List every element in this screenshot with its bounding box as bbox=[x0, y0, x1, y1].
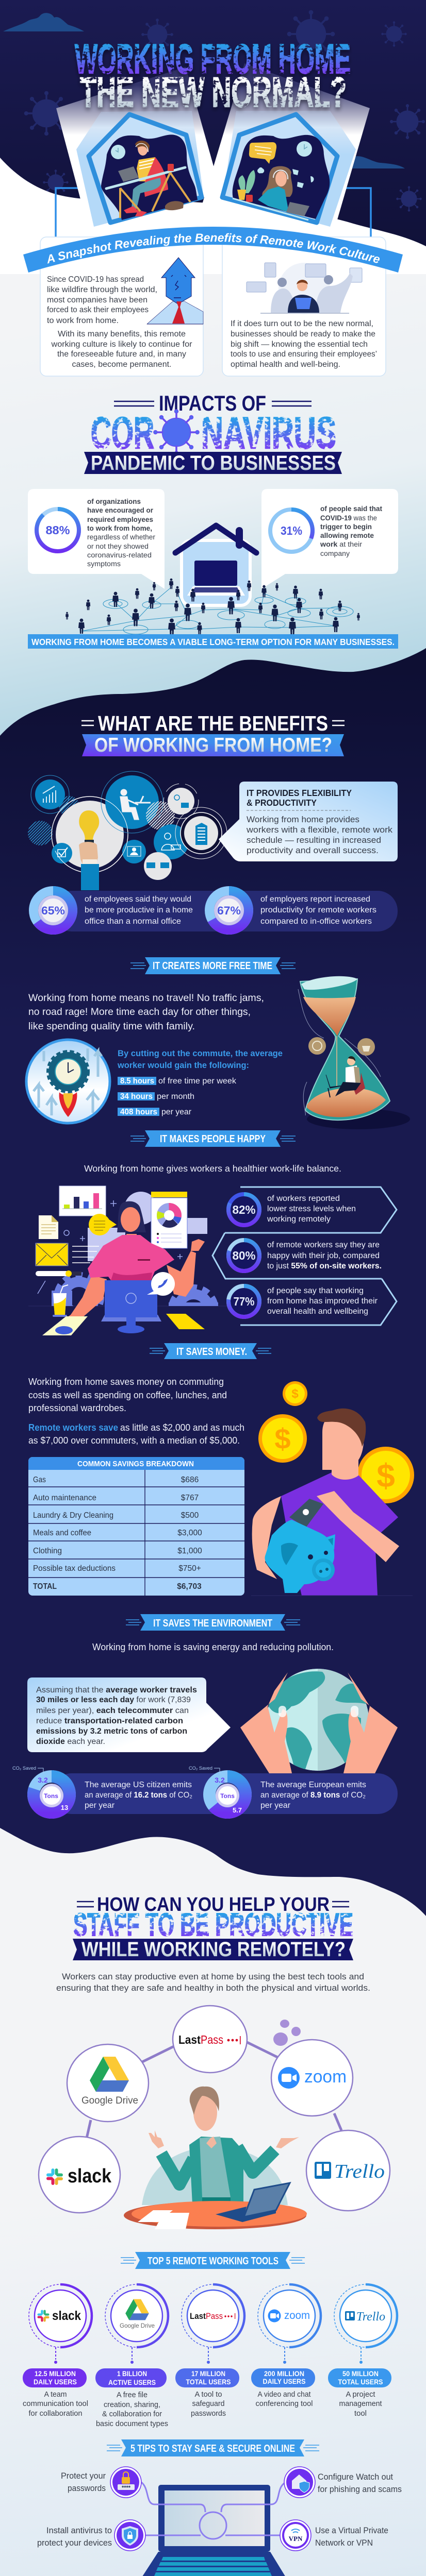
donut: 65% bbox=[34, 891, 73, 930]
illustration: man with piggy bank bbox=[251, 1381, 414, 1596]
heading: how can you help your staff bbox=[73, 1894, 353, 1961]
donut: European 8.9 tons: Tons bbox=[220, 1792, 235, 1800]
text: US citizen: an average of 16.2 tons of CO₂ bbox=[85, 1791, 192, 1800]
donut: US citizen 16.2 tons: 13 bbox=[61, 1804, 68, 1811]
text block intro right: tools to use and ensuring their employees’ bbox=[231, 350, 377, 359]
donut: European 8.9 tons bbox=[189, 1766, 245, 1814]
photo: woman working on headset bbox=[198, 63, 370, 230]
pie card bbox=[151, 1192, 187, 1248]
heading: how can you help your staff: WHILE WORKING REMOTELY? bbox=[81, 1938, 346, 1961]
stat: 82%: lower stress levels when bbox=[267, 1205, 356, 1213]
text: European: per year bbox=[260, 1801, 290, 1810]
heading: what are the benefits: OF WORKING FROM HOME? bbox=[94, 734, 332, 756]
donut: US citizen 16.2 tons: Tons bbox=[44, 1792, 58, 1800]
tool: Google Drive: Google Drive bbox=[120, 2322, 155, 2329]
text: 31 percent: work at their bbox=[320, 540, 363, 548]
text: saves money: as little as $2,000 and as much bbox=[120, 1422, 244, 1433]
tool: Trello bbox=[328, 2284, 397, 2418]
background: light middle section bbox=[0, 274, 426, 748]
table: common savings breakdown: Laundry & Dry Cleaning bbox=[33, 1511, 113, 1520]
tip: protect your passwords bbox=[61, 2467, 141, 2498]
tool: Slack bbox=[23, 2284, 92, 2418]
tip: protect your passwords: **** bbox=[122, 2485, 131, 2491]
text: gain the following with highlights: 408 hours bbox=[120, 1108, 157, 1116]
icon: light bulb in hand bbox=[79, 810, 99, 890]
ribbon: it saves the environment: IT SAVES THE ENVIRONMENT bbox=[153, 1618, 272, 1629]
tip: configure and watch phishing: for phishing and scams bbox=[318, 2485, 402, 2494]
text: gain the following with highlights: worker would gain the following: bbox=[117, 1060, 249, 1070]
text: no travel: no road rage! More time each day for other things, bbox=[28, 1007, 251, 1018]
stat: 77%: overall health and wellbeing bbox=[267, 1307, 368, 1316]
tool: Google Drive: & collaboration for bbox=[102, 2410, 162, 2418]
table: common savings breakdown: TOTAL bbox=[33, 1582, 57, 1591]
speech box: flexibility and productivity bbox=[219, 782, 398, 861]
monitor bbox=[101, 1280, 161, 1333]
tip: protect your passwords: Protect your bbox=[61, 2471, 106, 2481]
ribbon: top 5 remote working tools: TOP 5 REMOTE WORKING TOOLS bbox=[148, 2256, 278, 2267]
tool: Zoom: A video and chat bbox=[258, 2391, 310, 2399]
tool: LastPass: Pass bbox=[206, 2311, 223, 2321]
ribbon: top 5 remote working tools bbox=[121, 2252, 305, 2269]
tip: use a VPN bbox=[280, 2520, 388, 2551]
speech box: carbon emissions bbox=[27, 1677, 231, 1752]
photo: man working at desk bbox=[56, 67, 221, 236]
ribbon: it saves money: IT SAVES MONEY. bbox=[176, 1346, 247, 1358]
tool: Zoom: DAILY USERS bbox=[263, 2377, 305, 2385]
text: saves money: costs as well as spending on coffee, lunches, and bbox=[28, 1390, 227, 1400]
stat: 82%: of workers reported bbox=[267, 1194, 340, 1203]
tool: Google Drive: 1 BILLION bbox=[117, 2369, 147, 2378]
text: saves money: Remote workers save bbox=[28, 1422, 118, 1433]
tool: Trello: TOTAL USERS bbox=[338, 2378, 383, 2386]
speech box: flexibility and productivity: Working from home provides bbox=[247, 815, 359, 824]
stat: 80%: of remote workers say they are bbox=[267, 1241, 380, 1249]
donut: 67% bbox=[209, 891, 249, 930]
ribbon: it saves money bbox=[150, 1343, 271, 1359]
text block intro left: cases, become permanent. bbox=[72, 360, 171, 369]
icon: coronavirus bbox=[154, 410, 199, 455]
text: saves money: Working from home saves money on commuting bbox=[28, 1377, 224, 1387]
chart card bbox=[59, 1186, 106, 1216]
tool: Google Drive: creation, sharing, bbox=[104, 2401, 160, 2409]
tip: configure and watch phishing bbox=[284, 2467, 402, 2498]
text block intro left: Since COVID-19 has spread bbox=[47, 275, 144, 284]
speech box: flexibility and productivity: workers with a flexible, remote work bbox=[246, 825, 393, 835]
text: 88 percent: symptoms bbox=[87, 560, 121, 568]
text: 67 percent: productivity for remote workers bbox=[260, 906, 376, 914]
ribbon: it creates more free time bbox=[130, 957, 296, 974]
table: common savings breakdown: Clothing bbox=[33, 1547, 62, 1555]
tool: LastPass: Last bbox=[190, 2311, 206, 2321]
text block intro left: With its many benefits, this remote bbox=[58, 330, 186, 338]
banner: long-term option bbox=[28, 634, 398, 649]
text block intro right: If it does turn out to be the new normal, bbox=[231, 319, 373, 328]
heading: impacts of coronavirus: NAVIRUS bbox=[201, 409, 336, 458]
text: 67 percent bbox=[260, 895, 376, 926]
text: saves money: professional wardrobes. bbox=[28, 1403, 126, 1413]
text: 65 percent bbox=[85, 895, 193, 926]
text: gain the following with highlights: per month bbox=[157, 1092, 194, 1101]
text: 88 percent: to work from home, bbox=[87, 524, 152, 532]
callout: 88 percent organizations bbox=[28, 489, 165, 589]
logo bubble: LastPass bbox=[173, 2006, 247, 2073]
tool: LastPass: A tool to bbox=[195, 2391, 222, 2399]
text: 88 percent: required employees bbox=[87, 516, 153, 523]
heading: impacts of coronavirus bbox=[84, 391, 342, 474]
text: 88 percent: have encouraged or bbox=[87, 506, 154, 514]
text: no travel: like spending quality time with family. bbox=[28, 1021, 195, 1032]
ribbon: it makes people happy bbox=[130, 1130, 296, 1147]
logo bubble: LastPass: Pass bbox=[201, 2033, 223, 2046]
heading: impacts of coronavirus: IMPACTS OF bbox=[159, 391, 266, 415]
table: common savings breakdown: $6,703 bbox=[177, 1582, 202, 1591]
tool: Trello: 50 MILLION bbox=[342, 2369, 379, 2378]
dark wave section background bbox=[0, 648, 426, 1916]
text: workers can stay productive bbox=[56, 1972, 370, 1993]
speech box: carbon emissions: Assuming that the average worker travels bbox=[36, 1686, 197, 1694]
arched banner with subtitle: A Snapshot Revealing the Benefits of Remote Work Culture bbox=[47, 233, 380, 264]
text: 88 percent: or not they showed bbox=[87, 543, 149, 550]
tool: Slack: for collaboration bbox=[29, 2410, 83, 2418]
logo bubble: Zoom bbox=[271, 2040, 353, 2116]
table: common savings breakdown: $3,000 bbox=[177, 1529, 202, 1537]
speech box: carbon emissions: reduce transportation-related carbon bbox=[36, 1717, 183, 1725]
tool: LastPass: 17 MILLION bbox=[191, 2369, 225, 2378]
logo bubble: Google Drive: Google Drive bbox=[81, 2095, 138, 2106]
donut: 88% bbox=[37, 509, 79, 551]
banner: long-term option: WORKING FROM HOME BECOMES A VIABLE LONG-TERM OPTION FOR MANY BUSINESSES. bbox=[31, 637, 395, 647]
text block intro left: the foreseeable future and, in many bbox=[57, 350, 186, 359]
text: no travel: Working from home means no travel! No traffic jams, bbox=[28, 993, 264, 1004]
background: light lower sections bbox=[0, 1752, 426, 2576]
text block intro left: to work from home. bbox=[47, 316, 119, 325]
tool: Slack: communication tool bbox=[23, 2400, 88, 2408]
speech box: carbon emissions: dioxide each year. bbox=[36, 1737, 105, 1746]
icon: clock rocket bbox=[26, 1040, 110, 1123]
donut: 31% bbox=[270, 510, 313, 552]
text: no travel bbox=[28, 993, 264, 1032]
illustration: woman at desk with dashboards bbox=[28, 1186, 227, 1335]
stat pill: 65 and 67 percent productivity bbox=[34, 891, 398, 931]
tool: Google Drive: A free file bbox=[117, 2391, 148, 2399]
illustration: laptop with security connectors bbox=[140, 2482, 287, 2576]
tool: Zoom: zoom bbox=[284, 2310, 310, 2321]
tool: Zoom: conferencing tool bbox=[256, 2400, 313, 2408]
crowd of figures bbox=[65, 579, 360, 636]
donut: 65%: 65% bbox=[41, 904, 65, 917]
stat: 77% bbox=[228, 1279, 397, 1325]
arrow panels with stats bbox=[212, 1187, 397, 1325]
speech box: carbon emissions: emissions by 3.2 metric tons of carbon bbox=[36, 1727, 187, 1736]
heading: what are the benefits: WHAT ARE THE BENEFITS bbox=[98, 711, 328, 735]
tool: Trello: management bbox=[339, 2400, 382, 2408]
white wave under the sky bbox=[0, 158, 426, 274]
heading: impacts of coronavirus: PANDEMIC TO BUSINESSES bbox=[91, 452, 336, 474]
ribbon: it creates more free time: IT CREATES MORE FREE TIME bbox=[153, 960, 272, 972]
text block intro left: most companies have been bbox=[47, 296, 148, 304]
tool: LastPass: TOTAL USERS bbox=[186, 2378, 231, 2386]
ribbon: it makes people happy: IT MAKES PEOPLE HAPPY bbox=[160, 1133, 266, 1145]
intro card left bbox=[40, 237, 203, 376]
woman figure bbox=[59, 1201, 205, 1328]
donut: 31%: 31% bbox=[281, 524, 302, 537]
text: 31 percent: COVID-19 was the bbox=[320, 514, 377, 522]
text: gain the following with highlights: per year bbox=[161, 1108, 191, 1116]
icon: remote team illustration bbox=[247, 263, 362, 314]
text: 88 percent: regardless of whether bbox=[87, 533, 156, 541]
tool: Zoom bbox=[251, 2284, 321, 2408]
tool: Google Drive: basic document types bbox=[96, 2420, 168, 2428]
text block intro left: forced to ask their employees bbox=[47, 306, 149, 314]
tip: install antivirus bbox=[37, 2520, 145, 2551]
heading: what are the benefits bbox=[81, 711, 345, 756]
tip: use a VPN: Use a Virtual Private bbox=[315, 2526, 388, 2535]
table: common savings breakdown: Meals and coffee bbox=[33, 1529, 91, 1537]
text: saves money bbox=[28, 1377, 244, 1446]
heading: how can you help your staff: HOW CAN YOU HELP YOUR bbox=[97, 1894, 330, 1916]
icon: house with laptop bbox=[175, 526, 256, 605]
text: European bbox=[260, 1781, 366, 1810]
illustration: hands holding globe bbox=[240, 1669, 398, 1773]
background virus particles bbox=[24, 10, 424, 211]
text: gain the following with highlights: 34 hours bbox=[120, 1092, 153, 1101]
tip: protect your passwords: passwords bbox=[68, 2484, 106, 2493]
table: common savings breakdown: $767 bbox=[181, 1494, 199, 1502]
tool: Trello: Trello bbox=[356, 2310, 385, 2324]
text block intro left: like wildfire through the world, bbox=[47, 285, 157, 294]
icon: banknote bbox=[289, 1499, 323, 1528]
icon: coins: $ bbox=[376, 1457, 395, 1494]
heading: impacts of coronavirus: COR bbox=[91, 409, 154, 458]
stat: 82%: 82% bbox=[232, 1203, 256, 1216]
cloud right bbox=[307, 154, 405, 168]
decorative purple dots bbox=[273, 2020, 301, 2046]
cloud top left bbox=[3, 13, 84, 31]
text: gain the following with highlights bbox=[117, 1048, 283, 1116]
connector lines between tool logos bbox=[87, 2042, 341, 2138]
text: gain the following with highlights: By cutting out the commute, the average bbox=[118, 1048, 283, 1058]
ribbon: it saves the environment bbox=[126, 1614, 300, 1631]
table: common savings breakdown: $750+ bbox=[178, 1564, 201, 1573]
icon: piggy bank bbox=[265, 1520, 335, 1593]
stat: 77%: from home has improved their bbox=[267, 1297, 378, 1306]
text: 31 percent: company bbox=[320, 550, 350, 557]
speech box: carbon emissions: miles per year), each telecommuter can bbox=[36, 1706, 189, 1715]
text: saves money: as $7,000 over commuters, with a median of $5,000. bbox=[28, 1435, 240, 1446]
illustration: shrugging man at table bbox=[124, 2087, 307, 2229]
text: 65 percent: of employees said they would bbox=[85, 895, 191, 904]
text: 67 percent: of employers report increased bbox=[260, 895, 370, 904]
logo bubble: Trello bbox=[306, 2130, 390, 2211]
tool: Google Drive: ACTIVE USERS bbox=[108, 2378, 156, 2386]
icon: hourglass with worker bbox=[298, 976, 410, 1129]
text: 67 percent: compared to in-office workers bbox=[260, 917, 372, 926]
icon: coins bbox=[258, 1381, 414, 1503]
intro card right bbox=[222, 237, 386, 376]
tip: use a VPN: Network or VPN bbox=[315, 2538, 373, 2548]
speech box: flexibility and productivity: IT PROVIDES FLEXIBILITY bbox=[247, 788, 352, 798]
background: dark top sky bbox=[0, 0, 426, 274]
tip: use a VPN: VPN bbox=[289, 2535, 303, 2543]
stat: 80%: happy with their job, compared bbox=[267, 1251, 380, 1260]
speech box: carbon emissions: 30 miles or less each day for work (7,839 bbox=[36, 1696, 191, 1704]
arched banner with subtitle bbox=[23, 227, 403, 273]
stat: 80%: 80% bbox=[232, 1249, 256, 1262]
donut: European 8.9 tons: 5.7 bbox=[233, 1806, 242, 1814]
table: common savings breakdown bbox=[28, 1457, 244, 1596]
icon: coins: $ bbox=[291, 1387, 299, 1401]
table: common savings breakdown: Auto maintenance bbox=[33, 1494, 96, 1502]
donut: 88%: 88% bbox=[45, 523, 70, 537]
text: workers can stay productive: ensuring that they are safe and healthy in both the physical and virtual worlds. bbox=[56, 1984, 370, 1993]
table: common savings breakdown: Possible tax deductions bbox=[33, 1564, 116, 1573]
tool: LastPass bbox=[175, 2284, 244, 2418]
text block intro right bbox=[231, 319, 377, 369]
speech box: flexibility and productivity: productivity and overall success. bbox=[247, 845, 379, 855]
speech box: flexibility and productivity: schedule — resulting in increased bbox=[247, 835, 381, 845]
tool: Trello: A project bbox=[346, 2391, 375, 2399]
table: common savings breakdown: $686 bbox=[181, 1476, 199, 1484]
stat: 80%: to just 55% of on-site workers. bbox=[267, 1262, 382, 1270]
tip: install antivirus: protect your devices bbox=[37, 2538, 112, 2548]
title bbox=[75, 36, 351, 116]
tool: Trello: tool bbox=[354, 2410, 367, 2418]
tool: Zoom: 200 MILLION bbox=[264, 2369, 304, 2378]
text: 31 percent: of people said that bbox=[320, 505, 383, 513]
document bbox=[39, 1215, 58, 1239]
text: saving energy: Working from home is saving energy and reducing pollution. bbox=[92, 1642, 334, 1652]
tool: Google Drive bbox=[95, 2284, 168, 2428]
callout: 31 percent people bbox=[261, 489, 398, 589]
tool: Slack: slack bbox=[52, 2309, 81, 2323]
table: common savings breakdown: $1,000 bbox=[177, 1547, 202, 1555]
text block intro right: optimal health and well-being. bbox=[231, 360, 340, 369]
text block intro right: big shift — knowing the essential tech bbox=[231, 340, 368, 349]
text: gain the following with highlights: of free time per week bbox=[158, 1077, 236, 1086]
donut: US citizen 16.2 tons: CO₂ Saved bbox=[12, 1766, 36, 1771]
text: 88 percent: of organizations bbox=[87, 498, 141, 505]
stat: 77%: 77% bbox=[233, 1295, 255, 1308]
logo bubble: Slack bbox=[39, 2137, 120, 2213]
donut: European 8.9 tons: 3.2 bbox=[215, 1776, 225, 1784]
text: 31 percent bbox=[320, 505, 383, 557]
text: healthier work-life balance: Working from home gives workers a healthier work-life balance. bbox=[84, 1163, 341, 1174]
text: 65 percent: be more productive in a home bbox=[85, 906, 193, 914]
tool: LastPass: safeguard bbox=[192, 2400, 225, 2408]
logo bubble: Zoom: zoom bbox=[304, 2067, 347, 2087]
tip: install antivirus: Install antivirus to bbox=[46, 2526, 112, 2535]
text: 31 percent: trigger to begin bbox=[320, 523, 372, 531]
donut: 67%: 67% bbox=[217, 904, 241, 917]
text: 31 percent: allowing remote bbox=[320, 532, 374, 539]
worker inside hourglass bbox=[326, 1056, 365, 1097]
network of remote workers bbox=[81, 587, 353, 634]
table: common savings breakdown: COMMON SAVINGS BREAKDOWN bbox=[77, 1460, 194, 1468]
text block intro left: working culture is likely to continue for bbox=[51, 340, 192, 349]
envelope bbox=[36, 1243, 68, 1266]
blue frame behind photos bbox=[56, 188, 371, 247]
stat: 82%: working remotely bbox=[267, 1215, 331, 1224]
stat: 82% bbox=[225, 1187, 397, 1233]
tool: LastPass: passwords bbox=[191, 2410, 226, 2418]
donut: US citizen 16.2 tons bbox=[12, 1766, 70, 1812]
tip: configure and watch phishing: Configure Watch out bbox=[318, 2472, 393, 2482]
text: US citizen bbox=[85, 1781, 192, 1810]
logo bubble: Google Drive bbox=[67, 2044, 149, 2122]
tool: Slack: DAILY USERS bbox=[34, 2378, 77, 2386]
ribbon: 5 tips to stay safe: 5 TIPS TO STAY SAFE & SECURE ONLINE bbox=[130, 2443, 295, 2454]
text: 88 percent bbox=[87, 498, 156, 568]
logo bubble: Trello: Trello bbox=[334, 2161, 385, 2182]
text block intro right: businesses should be ready to make the bbox=[231, 330, 375, 338]
icon: coins: $ bbox=[274, 1422, 291, 1455]
text: US citizen: per year bbox=[85, 1801, 114, 1810]
ribbon: 5 tips to stay safe bbox=[107, 2439, 319, 2456]
logo bubble: Slack: slack bbox=[68, 2165, 112, 2187]
table: common savings breakdown: Gas bbox=[33, 1476, 46, 1484]
text: workers can stay productive: Workers can stay productive even at home by using the best tech tools and bbox=[62, 1972, 364, 1981]
stat: 80% bbox=[212, 1233, 382, 1279]
donut: European 8.9 tons: CO₂ Saved bbox=[189, 1766, 212, 1771]
text block intro left bbox=[47, 275, 192, 369]
text: gain the following with highlights: 8.5 hours bbox=[120, 1077, 154, 1086]
table: common savings breakdown: $500 bbox=[181, 1511, 199, 1520]
text: US citizen: The average US citizen emits bbox=[85, 1781, 192, 1789]
tool: Slack: A team bbox=[44, 2391, 67, 2399]
icon: house-head man bbox=[147, 258, 203, 324]
stat pill: CO2 emissions bbox=[12, 1766, 398, 1814]
tool: Slack: 12.5 MILLION bbox=[35, 2369, 76, 2378]
text: 65 percent: office than a normal office bbox=[85, 917, 181, 926]
illustration: ideas bubbles bbox=[28, 771, 227, 890]
text: European: The average European emits bbox=[260, 1781, 366, 1789]
text: 88 percent: coronavirus-related bbox=[87, 551, 152, 559]
speech box: flexibility and productivity: & PRODUCTIVITY bbox=[247, 798, 317, 808]
stat: 77%: of people say that working bbox=[267, 1286, 364, 1295]
logo bubble: LastPass: Last bbox=[178, 2033, 201, 2046]
text: European: an average of 8.9 tons of CO₂ bbox=[260, 1791, 366, 1800]
donut: US citizen 16.2 tons: 3.2 bbox=[38, 1776, 48, 1784]
